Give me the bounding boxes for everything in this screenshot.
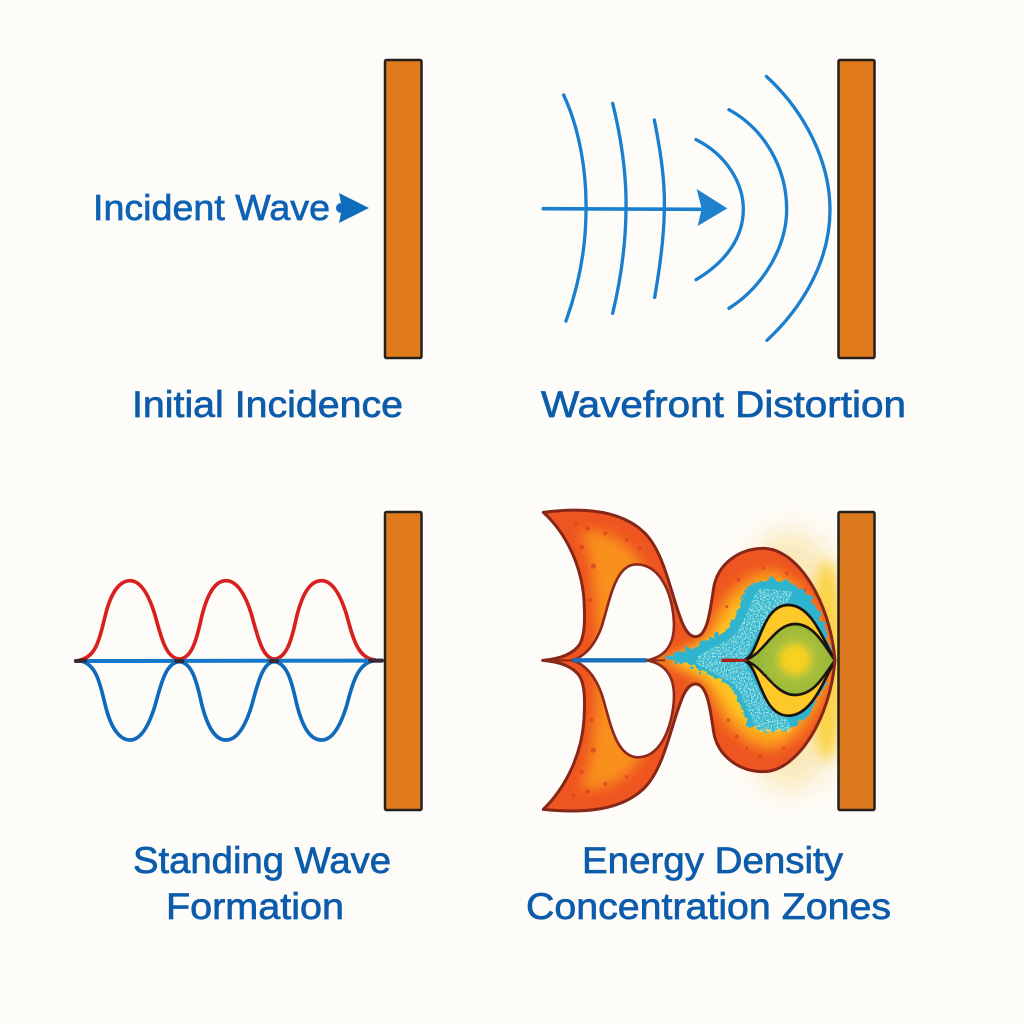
cyan zone: [662, 579, 832, 732]
heading: standing wave formation: [133, 840, 391, 927]
wall: top left: [385, 60, 422, 358]
outer outline: [543, 510, 835, 811]
heading: energy density concentration zones: Concentration Zones: [526, 886, 891, 927]
green lens: [743, 624, 835, 695]
centre axis tip: [722, 659, 747, 662]
panel: energy density concentration zones: [526, 500, 891, 927]
wavefronts and arrow: [543, 76, 830, 340]
cyan speckle: [697, 588, 793, 732]
heading: initial incidence: Initial Incidence: [132, 384, 403, 425]
energy density map: [541, 508, 837, 812]
red speckles: [572, 522, 807, 797]
label: incident wave: Incident Wave: [93, 187, 330, 228]
heading: energy density concentration zones: Energy Density: [582, 840, 844, 881]
hole outlines: [572, 564, 674, 757]
energy body: [546, 512, 833, 810]
standing wave chart: [76, 581, 382, 740]
infographic canvas: [74, 58, 904, 920]
heading: energy density concentration zones: [526, 840, 891, 927]
blue axis: [573, 654, 647, 667]
tip: [543, 657, 665, 663]
heading: wavefront distortion: Wavefront Distortion: [541, 384, 906, 425]
panel: standing wave formation: [76, 512, 421, 927]
arrow: incident wave: [336, 193, 369, 223]
wall: bottom left: [385, 512, 422, 810]
green speckle: [750, 627, 832, 693]
wall: bottom right: [838, 512, 874, 810]
heading: standing wave formation: Standing Wave: [133, 840, 391, 881]
glow: yellow near wall: [739, 518, 838, 803]
wall: top right: [838, 60, 874, 358]
heading: standing wave formation: Formation: [166, 886, 344, 927]
panel: wavefront distortion: [541, 60, 906, 425]
yellow lens: [743, 605, 835, 716]
panel: initial incidence: [93, 60, 422, 425]
